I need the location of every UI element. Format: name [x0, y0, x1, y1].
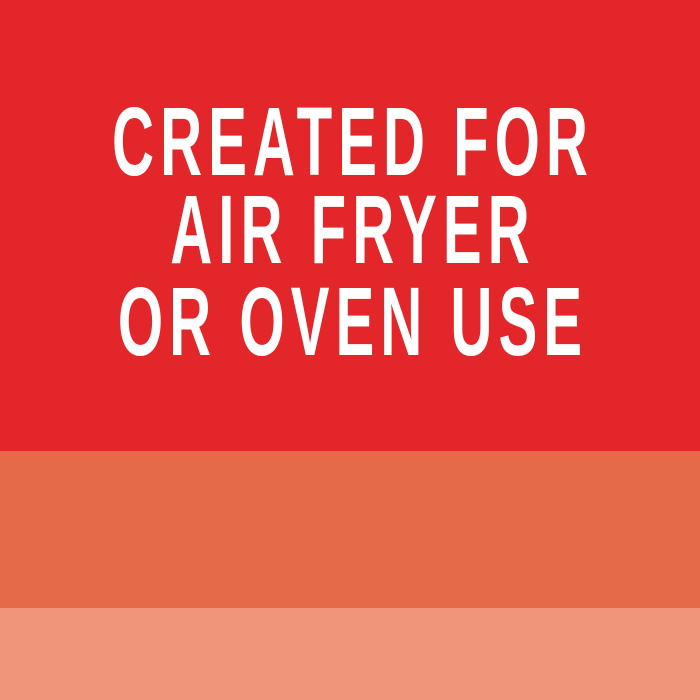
title: AIR FRYER	[170, 176, 536, 284]
panel: light salmon bottom band	[0, 608, 700, 700]
title: CREATED FOR	[112, 88, 594, 196]
title	[112, 88, 594, 376]
title: OR OVEN USE	[118, 268, 588, 376]
panel: orange middle band	[0, 451, 700, 608]
panel: red top band	[0, 0, 700, 451]
